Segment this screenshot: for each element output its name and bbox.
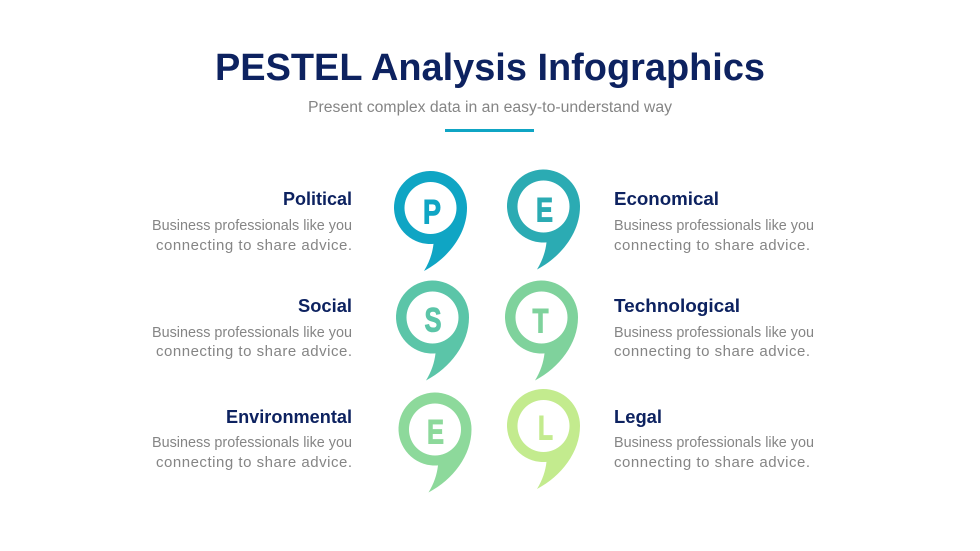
icon: speech pin T: T [532, 302, 549, 340]
icon: speech pin E second [399, 393, 472, 492]
description: political: Business professionals like you [152, 217, 352, 234]
heading: technological: Technological [614, 296, 740, 316]
description: political: connecting to share advice. [156, 237, 352, 254]
heading: legal: Legal [614, 407, 662, 427]
icon: speech pin L: L [538, 410, 553, 448]
description: economical: Business professionals like you [614, 217, 814, 234]
icon: speech pin P [394, 171, 467, 271]
description: social [152, 324, 352, 360]
description: economical [614, 217, 814, 254]
description: technological: connecting to share advice. [614, 343, 810, 360]
heading: environmental: Environmental [226, 407, 352, 427]
icon: speech pin T [505, 281, 578, 380]
description: social: connecting to share advice. [156, 343, 352, 360]
heading: political: Political [283, 189, 352, 209]
panel: technological text [614, 296, 814, 360]
panel: political text [152, 189, 352, 254]
description: environmental: Business professionals like you [152, 434, 352, 451]
panel: environmental text [152, 407, 352, 471]
panel: economical text [614, 189, 814, 254]
description: legal [614, 434, 814, 471]
subtitle: Present complex data in an easy-to-understand way [308, 99, 672, 116]
icon: speech pin E: E [536, 192, 553, 230]
title: PESTEL Analysis Infographics [215, 47, 765, 89]
description: technological [614, 324, 814, 360]
heading: social: Social [298, 296, 352, 316]
icon: speech pin E second: E [427, 414, 444, 452]
description: legal: Business professionals like you [614, 434, 814, 451]
icon: speech pin S [396, 281, 469, 380]
description: social: Business professionals like you [152, 324, 352, 341]
panel: social text [152, 296, 352, 360]
description: political [152, 217, 352, 254]
description: legal: connecting to share advice. [614, 454, 810, 471]
icon: speech pin S: S [424, 302, 442, 340]
title underline accent [445, 129, 534, 132]
panel: legal text [614, 407, 814, 471]
icon: speech pin E [507, 170, 580, 270]
heading: economical: Economical [614, 189, 719, 209]
description: environmental: connecting to share advice. [156, 454, 352, 471]
description: technological: Business professionals like you [614, 324, 814, 341]
description: economical: connecting to share advice. [614, 237, 810, 254]
icon: speech pin L [507, 389, 580, 489]
icon: speech pin P: P [423, 194, 441, 232]
description: environmental [152, 434, 352, 471]
